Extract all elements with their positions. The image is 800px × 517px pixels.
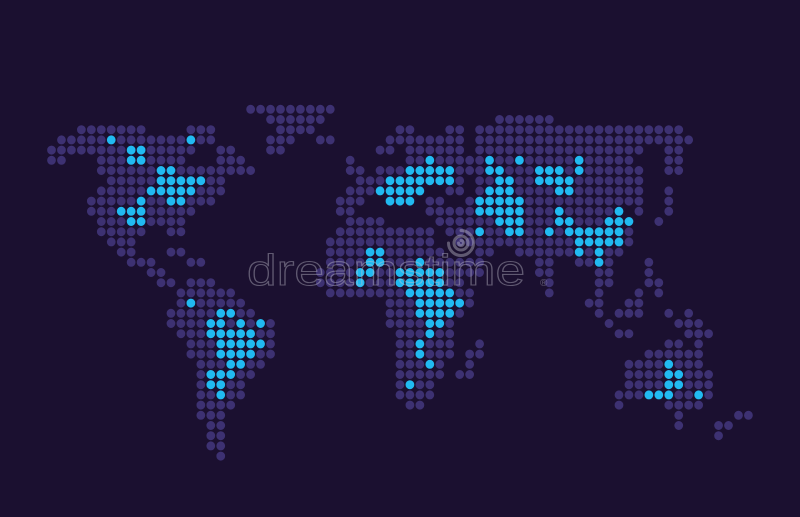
- region: Oceania: [619, 313, 749, 436]
- region: North America: [52, 130, 251, 283]
- watermark: [247, 230, 548, 295]
- region: Europe and Asia: [340, 120, 689, 334]
- watermark spiral icon: [448, 230, 474, 255]
- region: Africa: [320, 232, 480, 405]
- registered mark: ®: [540, 278, 548, 289]
- region: South America: [171, 283, 271, 456]
- dot map: [52, 109, 749, 456]
- watermark wordmark: dreamstime: [247, 246, 525, 295]
- region: Greenland: [251, 109, 330, 150]
